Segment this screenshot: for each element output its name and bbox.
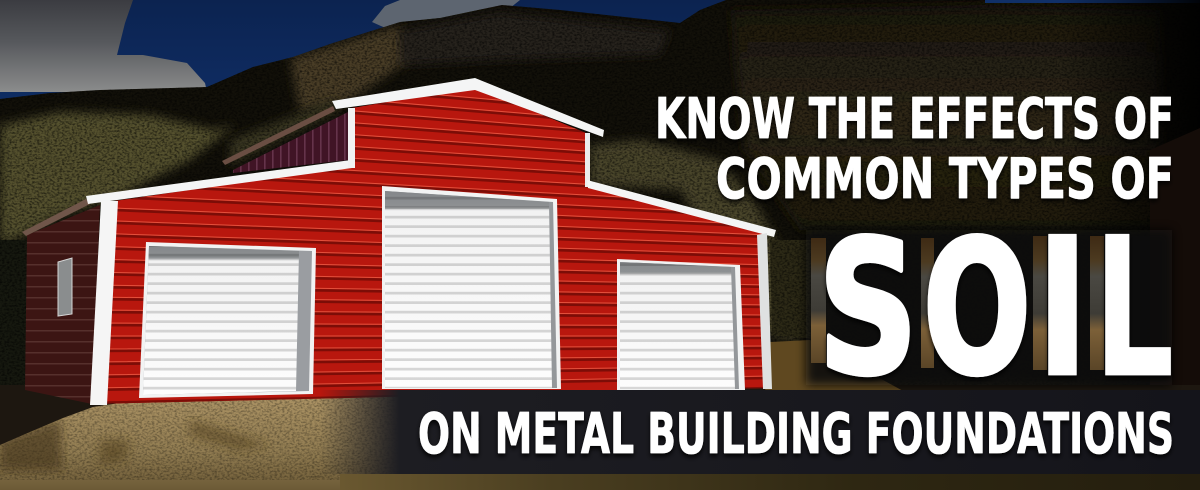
- right door: [617, 259, 745, 390]
- right post upper: [585, 133, 590, 187]
- barn building: [22, 64, 776, 405]
- gable roof trim: [332, 78, 604, 137]
- ridge top band: [400, 12, 670, 65]
- sky sliver right: [985, 0, 1200, 3]
- heading: SOIL: S: [818, 202, 918, 416]
- 3D extrusion of SOIL lettering: [811, 236, 1104, 370]
- ground: soil: [0, 340, 1200, 490]
- left corner post: [90, 201, 118, 405]
- side window: [58, 258, 72, 316]
- bottom soil strip: [340, 474, 1200, 490]
- right corner post: [757, 233, 772, 389]
- dark backing behind soil lettering: [806, 230, 1172, 385]
- side roof: [22, 199, 90, 236]
- red front wall: [107, 90, 763, 404]
- heading: top lines: [655, 87, 1174, 212]
- left door: [139, 242, 316, 398]
- left eave trim: [86, 160, 352, 204]
- sand mound: [0, 392, 420, 490]
- heading: SOIL: [818, 196, 1174, 421]
- dark building silhouette right: [1150, 128, 1200, 400]
- lit ridge rock: [290, 25, 410, 112]
- heading: SOIL: O: [923, 202, 1031, 416]
- slope behind clerestory: [230, 100, 340, 165]
- cloud: left: [0, 0, 207, 92]
- bottom dark band: [320, 390, 1200, 474]
- side wall: [25, 205, 100, 404]
- lower hill right of barn: [770, 240, 810, 338]
- clerestory post: [348, 108, 355, 168]
- background: sky: [0, 0, 1200, 130]
- center door: [382, 186, 561, 389]
- olive slope left: [0, 112, 235, 245]
- upper cliff right: [730, 5, 1160, 230]
- clerestory wall: [233, 112, 348, 173]
- heading: SOIL: I: [1035, 196, 1090, 421]
- lit olive hill: [590, 140, 800, 340]
- clerestory roof: [222, 106, 335, 165]
- right eave trim: [587, 180, 776, 237]
- cloud: top centre: [372, 0, 520, 30]
- trees far left: [0, 240, 23, 246]
- dark overlay: right edge: [1060, 0, 1200, 400]
